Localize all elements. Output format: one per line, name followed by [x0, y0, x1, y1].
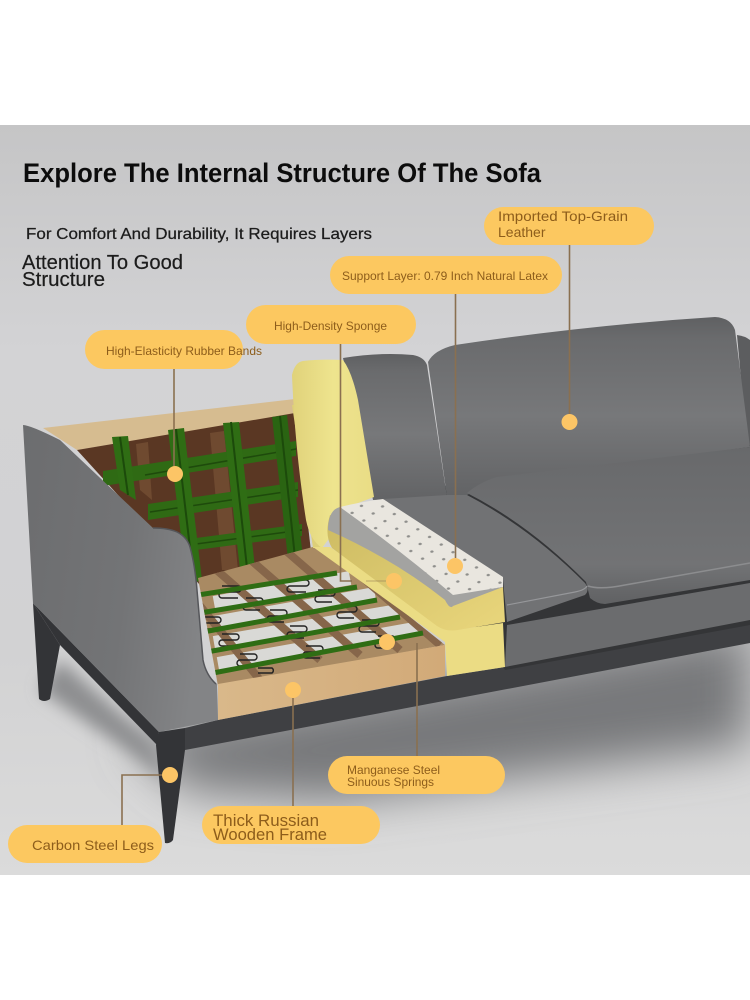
yellow seat base — [313, 547, 505, 676]
brown interior back panel — [77, 413, 312, 585]
label: thick russian wooden frame: Wooden Frame — [213, 825, 327, 844]
interior wood posts — [136, 431, 238, 570]
perforated latex top — [340, 499, 503, 595]
armrest dark edge — [153, 528, 216, 684]
foam seat layer — [327, 515, 505, 630]
label: support layer — [330, 256, 562, 294]
sofa structure infographic — [0, 125, 750, 875]
back cushion grey (small) — [343, 354, 447, 500]
spring deck — [175, 545, 445, 686]
left seat piping — [507, 586, 587, 605]
label: imported top-grain leather: Leather — [498, 224, 546, 240]
sofa illustration — [23, 317, 750, 843]
white band restoring page margin — [0, 875, 750, 1000]
back cushion foam — [292, 360, 374, 548]
label: high-density sponge — [246, 305, 416, 344]
label: imported top-grain leather — [484, 207, 654, 245]
label: imported top-grain leather: Imported Top-Grain — [498, 208, 628, 224]
side base rail — [33, 603, 159, 745]
main seat cushion — [467, 447, 750, 604]
leader lines — [122, 245, 570, 825]
title: Explore The Internal Structure Of The Sofa — [23, 158, 542, 188]
wooden front frame — [218, 645, 445, 720]
callout dots — [162, 414, 578, 783]
label: manganese steel sinuous springs: Manganese Steel — [347, 763, 440, 777]
label: support layer: Support Layer: 0.79 Inch Natural Latex — [342, 269, 548, 283]
front leg — [156, 728, 185, 843]
label: manganese steel sinuous springs: Sinuous Springs — [347, 775, 434, 789]
label: manganese steel sinuous springs — [328, 756, 505, 794]
front base rail — [185, 620, 750, 750]
label: carbon steel legs — [8, 825, 162, 863]
large back cushion — [428, 317, 750, 497]
left armrest — [23, 425, 218, 732]
left seat cushion — [383, 495, 588, 622]
grey studio backdrop — [0, 125, 750, 875]
right armrest sliver — [737, 335, 750, 445]
vertical rubber bands — [112, 415, 304, 585]
subtitle: For Comfort And Durability, It Requires Layers — [26, 226, 372, 243]
back cushion foam strip — [292, 405, 322, 548]
label: thick russian wooden frame: Thick Russian — [213, 811, 319, 830]
label: high-density sponge: High-Density Sponge — [274, 319, 387, 333]
main seat piping — [588, 563, 750, 588]
label: high-elasticity rubber bands — [85, 330, 262, 369]
back leg — [33, 603, 60, 701]
horizontal rubber bands — [103, 441, 302, 550]
label: thick russian wooden frame — [202, 806, 380, 844]
dark seat base — [383, 440, 750, 670]
grey latex edge — [328, 507, 503, 607]
secondary heading: Attention To Good — [22, 252, 183, 274]
grey seat rail — [505, 583, 750, 667]
floor shadow — [40, 625, 750, 800]
secondary heading: Structure — [22, 269, 105, 291]
wooden back plank — [43, 399, 295, 450]
label: carbon steel legs: Carbon Steel Legs — [32, 837, 154, 853]
label: high-elasticity rubber bands: High-Elasticity Rubber Bands — [106, 344, 262, 358]
